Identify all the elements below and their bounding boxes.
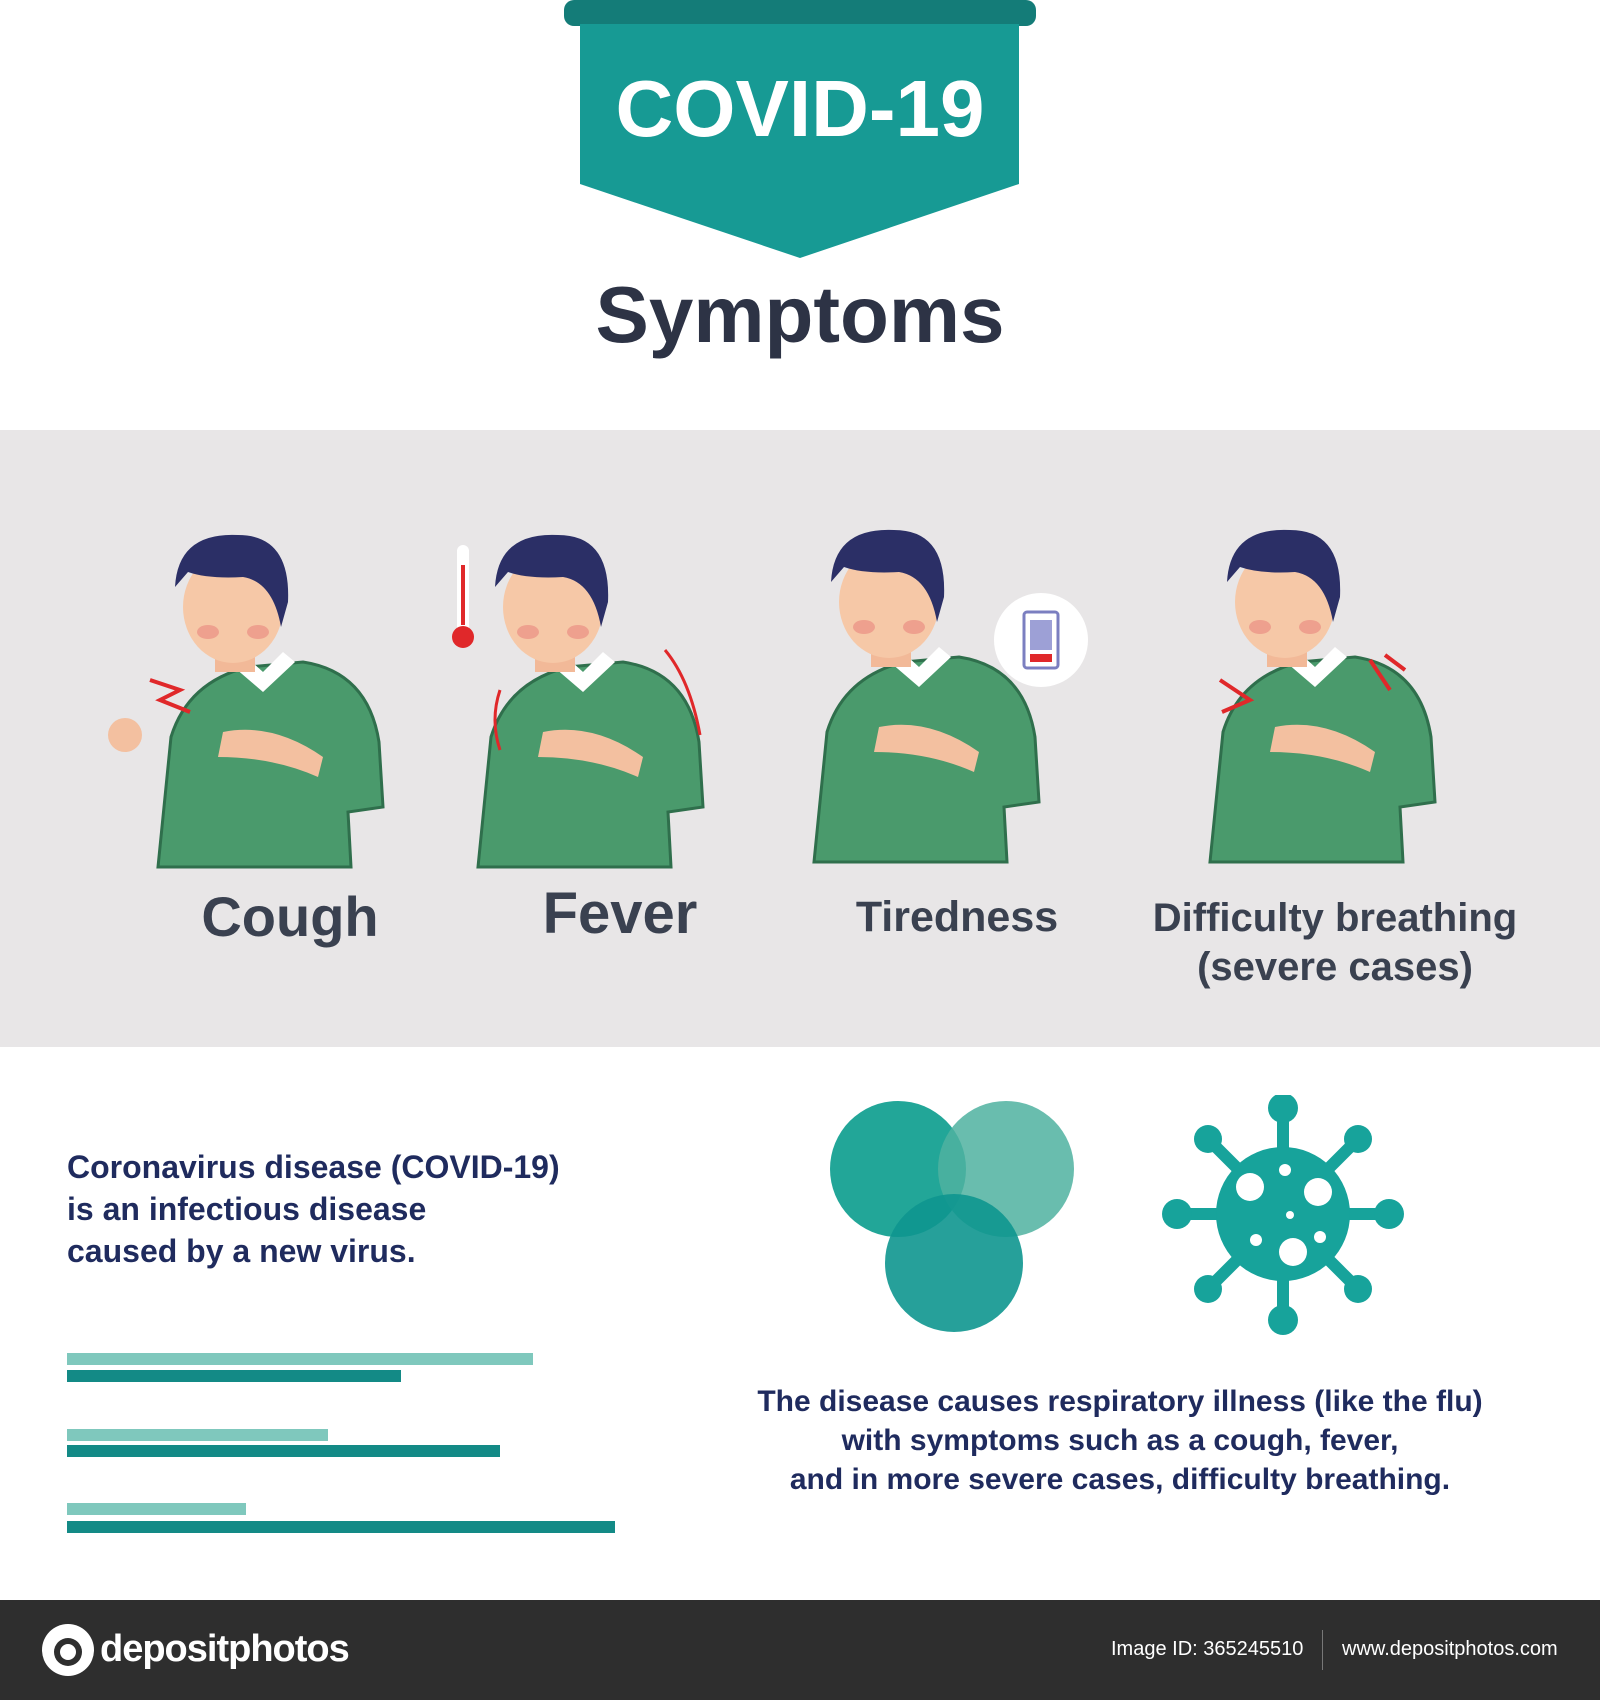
panel: symptoms <box>0 430 1600 1047</box>
title banner <box>564 0 1036 258</box>
figure: difficulty breathing <box>1210 530 1435 862</box>
footer <box>0 1600 1600 1700</box>
label: Difficulty breathing: Difficulty breathing <box>1153 896 1517 940</box>
text block: definition: Coronavirus disease (COVID-19) <box>67 1149 560 1185</box>
figure: cough <box>108 535 383 867</box>
text block: description <box>757 1385 1483 1496</box>
text block: description: with symptoms such as a cough, fever, <box>842 1424 1398 1457</box>
footer logo <box>42 1624 349 1676</box>
label: Difficulty breathing <box>1153 896 1517 989</box>
title banner: COVID-19 <box>616 64 984 153</box>
label: Difficulty breathing: (severe cases) <box>1197 945 1473 989</box>
bar chart <box>67 1353 615 1533</box>
icon: virus <box>1162 1095 1404 1335</box>
footer logo: depositphotos <box>100 1628 349 1670</box>
footer url: www.depositphotos.com <box>1342 1638 1558 1660</box>
label: Cough: Cough <box>201 885 379 948</box>
label: Tiredness: Tiredness <box>856 893 1058 941</box>
footer image id: Image ID: 365245510 <box>1111 1638 1303 1660</box>
icon: venn circles <box>830 1101 1074 1332</box>
text block: description: The disease causes respiratory illness (like the flu) <box>757 1385 1483 1418</box>
text block: definition: caused by a new virus. <box>67 1233 416 1269</box>
figure: tiredness <box>814 530 1088 862</box>
label: Fever: Fever <box>543 881 697 946</box>
text block: definition <box>67 1149 560 1269</box>
text block: definition: is an infectious disease <box>67 1191 426 1227</box>
figure: fever <box>452 535 703 867</box>
subtitle: Symptoms: Symptoms <box>596 270 1004 359</box>
text block: description: and in more severe cases, difficulty breathing. <box>790 1463 1450 1496</box>
